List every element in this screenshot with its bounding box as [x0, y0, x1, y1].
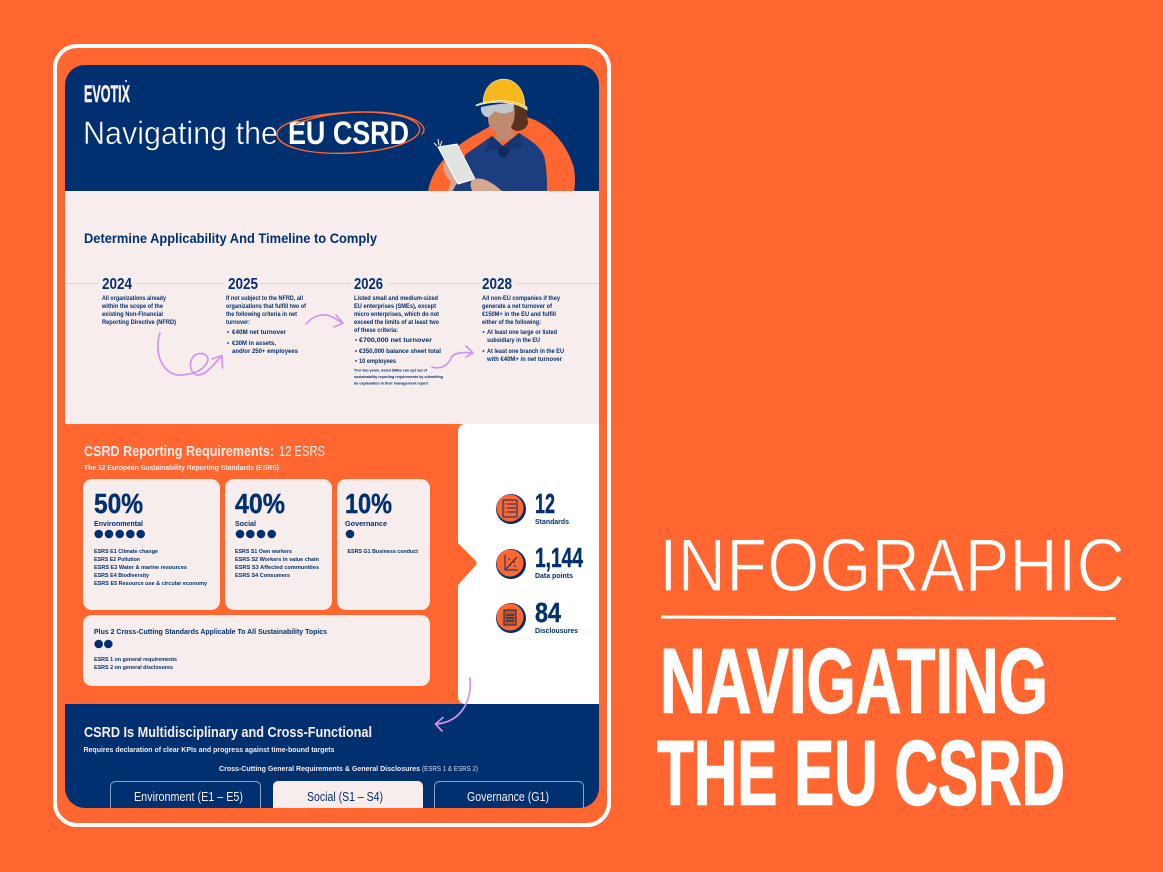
timeline 2025: €40M net turnover — [232, 330, 287, 336]
timeline 2026: of these criteria: — [354, 328, 398, 334]
hair — [511, 104, 528, 131]
arrow: key figures to multidisciplinary — [436, 678, 470, 731]
card: environmental: ESRS E4 Biodiversity — [94, 573, 150, 579]
timeline 2026: 2026 — [354, 276, 383, 293]
hard hat — [476, 79, 527, 110]
notch arrow — [458, 543, 476, 585]
tab: social — [273, 781, 423, 821]
timeline 2028: At least one branch in the EU — [487, 349, 564, 355]
logo: EVOTIX — [84, 81, 130, 108]
workwear — [448, 133, 547, 192]
timeline 2025 — [226, 276, 307, 355]
arrow: 2024 to 2025 — [158, 333, 222, 375]
timeline 2026: Listed small and medium-sized — [354, 296, 438, 302]
device frame — [55, 46, 609, 825]
timeline 2028: At least one large or listed — [487, 330, 557, 336]
timeline 2025: the following criteria in net — [226, 312, 297, 318]
timeline 2024 — [101, 276, 176, 326]
section heading: CSRD Reporting Requirements: — [84, 443, 274, 460]
panel: reporting requirements — [65, 424, 599, 704]
left hand — [443, 162, 458, 192]
stat: data points: Data points — [535, 573, 573, 580]
tab: environment: Environment (E1 – E5) — [134, 789, 243, 804]
timeline 2025: If not subject to the NFRD, all — [226, 296, 303, 302]
card: environmental: ESRS E2 Pollution — [94, 557, 141, 563]
promo title — [657, 630, 1065, 824]
card: social: Social — [235, 519, 256, 528]
safety glasses — [481, 103, 514, 117]
stat: disclosures — [496, 602, 578, 633]
card: cross-cutting standards: Plus 2 Cross-Cutting Standards Applicable To All Sustainability Topics — [94, 629, 327, 636]
spark lines — [434, 139, 442, 146]
stat: disclosures: Disclousures — [535, 628, 578, 635]
timeline 2025: and/or 250+ employees — [232, 349, 299, 355]
infographic card — [65, 65, 599, 822]
card: social — [225, 479, 332, 610]
timeline 2028: with €40M+ in net turnover — [486, 357, 563, 363]
timeline 2026 — [354, 276, 444, 386]
tab: environment — [110, 782, 260, 822]
card: governance — [337, 479, 430, 610]
timeline 2028 — [482, 276, 564, 363]
title: EU CSRD — [288, 115, 409, 151]
card: governance: Governance — [345, 519, 387, 528]
stat: standards: 12 — [535, 488, 555, 519]
card: social: ESRS S3 Affected communities — [235, 565, 319, 571]
card: environmental: ESRS E5 Resource use & circular economy — [94, 581, 208, 587]
timeline 2024: Reporting Directive (NFRD) — [102, 320, 176, 326]
stat: disclosures: 84 — [535, 597, 561, 628]
panel: timeline — [65, 191, 599, 424]
timeline axis — [65, 283, 599, 284]
card: cross-cutting standards: ESRS 2 on general disclosures — [94, 665, 173, 671]
footnote — [354, 368, 444, 386]
tab: governance: Governance (G1) — [467, 789, 549, 804]
timeline 2025: 2025 — [228, 276, 258, 293]
timeline 2024: 2024 — [102, 276, 132, 293]
section heading: 12 ESRS — [279, 443, 325, 460]
card: governance: 10% — [345, 488, 392, 519]
timeline 2026: micro enterprises, which do not — [354, 312, 439, 318]
right hand — [471, 178, 503, 192]
timeline 2026: €700,000 net turnover — [359, 338, 433, 344]
orange blob — [428, 116, 575, 192]
timeline 2024: existing Non-Financial — [102, 312, 163, 318]
timeline 2026: €350,000 balance sheet total — [359, 349, 441, 355]
card: social: 40% — [235, 488, 285, 519]
title — [86, 120, 408, 150]
card: environmental: Environmental — [94, 519, 143, 528]
tab: social: Social (S1 – S4) — [307, 789, 383, 804]
promo divider — [661, 616, 1116, 620]
neck and face — [488, 105, 515, 142]
card: environmental: ESRS E3 Water & marine resources — [94, 565, 187, 571]
timeline 2025: organizations that fulfill two of — [226, 304, 307, 310]
timeline 2026: EU enterprises (SMEs), except — [354, 304, 436, 310]
subheading: The 12 European Sustainability Reporting Standards (ESRS) — [84, 465, 279, 472]
card: social: ESRS S1 Own workers — [235, 549, 292, 555]
card: governance: ESRS G1 Business conduct — [348, 549, 418, 555]
section heading: CSRD Is Multidisciplinary and Cross-Functional — [84, 724, 372, 741]
card: environmental — [83, 479, 220, 610]
stat: standards — [496, 494, 569, 524]
card: cross-cutting standards: ESRS 1 on general requirements — [94, 657, 177, 663]
timeline 2028: generate a net turnover of — [482, 304, 553, 310]
timeline 2025: €30M in assets, — [232, 341, 276, 347]
timeline 2025: turnover: — [226, 320, 250, 326]
tab: governance — [434, 782, 584, 822]
person illustration — [428, 79, 575, 192]
timeline 2024: within the scope of the — [101, 304, 164, 310]
subheading: Requires declaration of clear KPIs and progress against time-bound targets — [84, 747, 335, 754]
timeline 2028: subsidiary in the EU — [487, 338, 540, 344]
timeline 2026: 10 employees — [359, 359, 397, 365]
section heading: Determine Applicability And Timeline to Comply — [84, 230, 377, 246]
card: social: ESRS S2 Workers in value chain — [235, 557, 320, 563]
stat: data points — [496, 548, 584, 580]
panel: key figures — [458, 424, 599, 704]
card: environmental: ESRS E1 Climate change — [94, 549, 158, 555]
cross-cutting line: Cross-Cutting General Requirements & General Disclosures — [219, 766, 420, 773]
arrow: 2026 to 2028 — [432, 346, 473, 368]
card: cross-cutting standards — [83, 615, 430, 686]
timeline 2026: exceed the limits of at least two — [354, 320, 439, 326]
logo — [84, 80, 130, 102]
timeline 2024: All organizations already — [102, 296, 167, 302]
card: environmental: 50% — [94, 488, 143, 519]
tablet — [438, 144, 475, 184]
timeline 2028: €150M+ in the EU and fulfill — [482, 312, 556, 318]
timeline 2028: 2028 — [482, 276, 512, 293]
footnote: sustainability reporting requirements by submitting — [354, 374, 444, 379]
stat: standards: Standards — [535, 519, 569, 526]
panel: multidisciplinary — [65, 704, 599, 808]
panel: header — [65, 65, 599, 192]
cross-cutting line: (ESRS 1 & ESRS 2) — [422, 766, 478, 773]
title: Navigating the — [83, 115, 278, 151]
timeline 2028: All non-EU companies if they — [482, 296, 561, 302]
footnote: an explanation in their management report — [354, 380, 429, 386]
timeline 2028: either of the following: — [482, 320, 541, 326]
footnote: *For two years, listed SMEs can opt out of — [354, 368, 428, 372]
hand-drawn ellipse — [277, 112, 424, 153]
stat: data points: 1,144 — [535, 542, 583, 573]
arrow: 2025 to 2026 — [306, 315, 343, 327]
card: social: ESRS S4 Consumers — [235, 573, 290, 579]
